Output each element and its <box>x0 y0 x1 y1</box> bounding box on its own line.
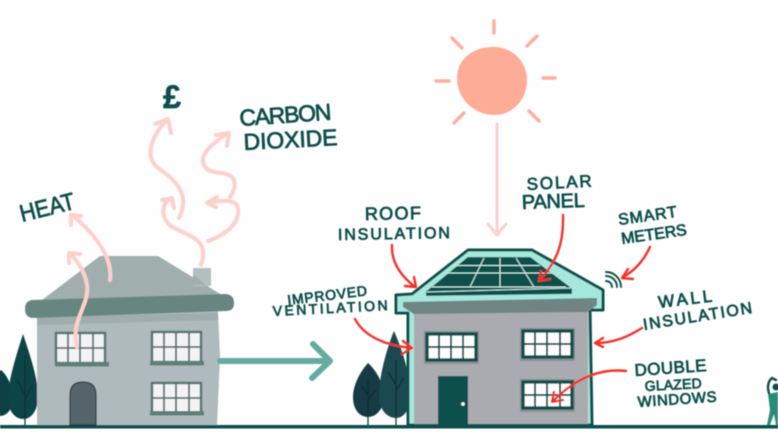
icon: sun <box>436 21 555 123</box>
icon: wifi signal <box>606 272 621 287</box>
panel: old leaky house <box>0 256 234 425</box>
carbon arrow: upper <box>203 133 235 197</box>
label: carbon dioxide: CARBON <box>239 99 332 131</box>
label: roof insulation: ROOF <box>365 203 421 224</box>
heat arrow: roof <box>71 215 110 280</box>
window: top left <box>55 333 109 366</box>
red arrow: solar panel <box>539 215 563 281</box>
trees: right house <box>353 331 410 425</box>
label: carbon dioxide: DIOXIDE <box>243 124 338 155</box>
label: heat: HEAT <box>17 188 78 228</box>
window: bottom right <box>150 383 204 416</box>
label: roof insulation: INSULATION <box>338 225 450 244</box>
window shadows <box>424 328 575 412</box>
wall top band <box>37 313 218 325</box>
red arrow: roof insulation <box>392 245 416 287</box>
panel: retrofitted house <box>353 250 621 425</box>
red arrow: ventilation <box>355 319 412 354</box>
red arrow: double glazing <box>552 370 626 402</box>
trees: left house <box>0 334 38 425</box>
label: carbon dioxide <box>239 99 338 155</box>
heat arrow: window <box>69 253 87 347</box>
label: wall insulation: INSULATION <box>642 300 753 334</box>
label: smart meters: SMART <box>617 204 678 229</box>
label: solar panel: PANEL <box>521 190 585 214</box>
arrow: old to new house <box>220 344 330 378</box>
label: improved ventilation <box>272 282 388 319</box>
money arrow <box>151 119 183 218</box>
label: solar panel: SOLAR <box>526 172 592 194</box>
label: improved ventilation: VENTILATION <box>272 297 388 319</box>
icon: pound sign: £ <box>163 79 181 115</box>
wall <box>414 312 588 424</box>
label: double glazed windows: WINDOWS <box>637 389 717 411</box>
eaves <box>25 294 234 318</box>
label: double glazed windows <box>634 356 717 411</box>
window: top right <box>150 332 204 366</box>
label: improved ventilation: IMPROVED <box>286 282 368 308</box>
red arrow: smart meters <box>622 247 650 279</box>
label: smart meters: METERS <box>620 222 688 248</box>
insulated shell and roof <box>396 250 603 425</box>
window: top left <box>427 334 476 360</box>
eaves shadow <box>403 298 597 314</box>
door <box>70 382 96 425</box>
window: bottom right <box>523 382 572 408</box>
chimney <box>193 268 211 286</box>
label: wall insulation: WALL <box>657 287 713 312</box>
label: solar panel <box>521 172 592 214</box>
roof <box>42 256 222 300</box>
ground line <box>0 425 778 428</box>
door <box>438 376 468 425</box>
figure: person waving <box>767 378 778 425</box>
label: double glazed windows: DOUBLE <box>634 356 707 380</box>
label: smart meters <box>617 204 688 248</box>
red arrow: wall insulation <box>595 328 642 347</box>
sun ray arrow <box>488 124 506 235</box>
house wall <box>37 311 220 425</box>
carbon arrow: chimney left <box>162 198 203 265</box>
window: top right <box>523 331 572 357</box>
label: roof insulation <box>338 203 450 244</box>
label: double glazed windows: GLAZED <box>644 375 702 394</box>
carbon arrow: chimney right <box>207 197 238 241</box>
solar panel <box>427 258 571 295</box>
